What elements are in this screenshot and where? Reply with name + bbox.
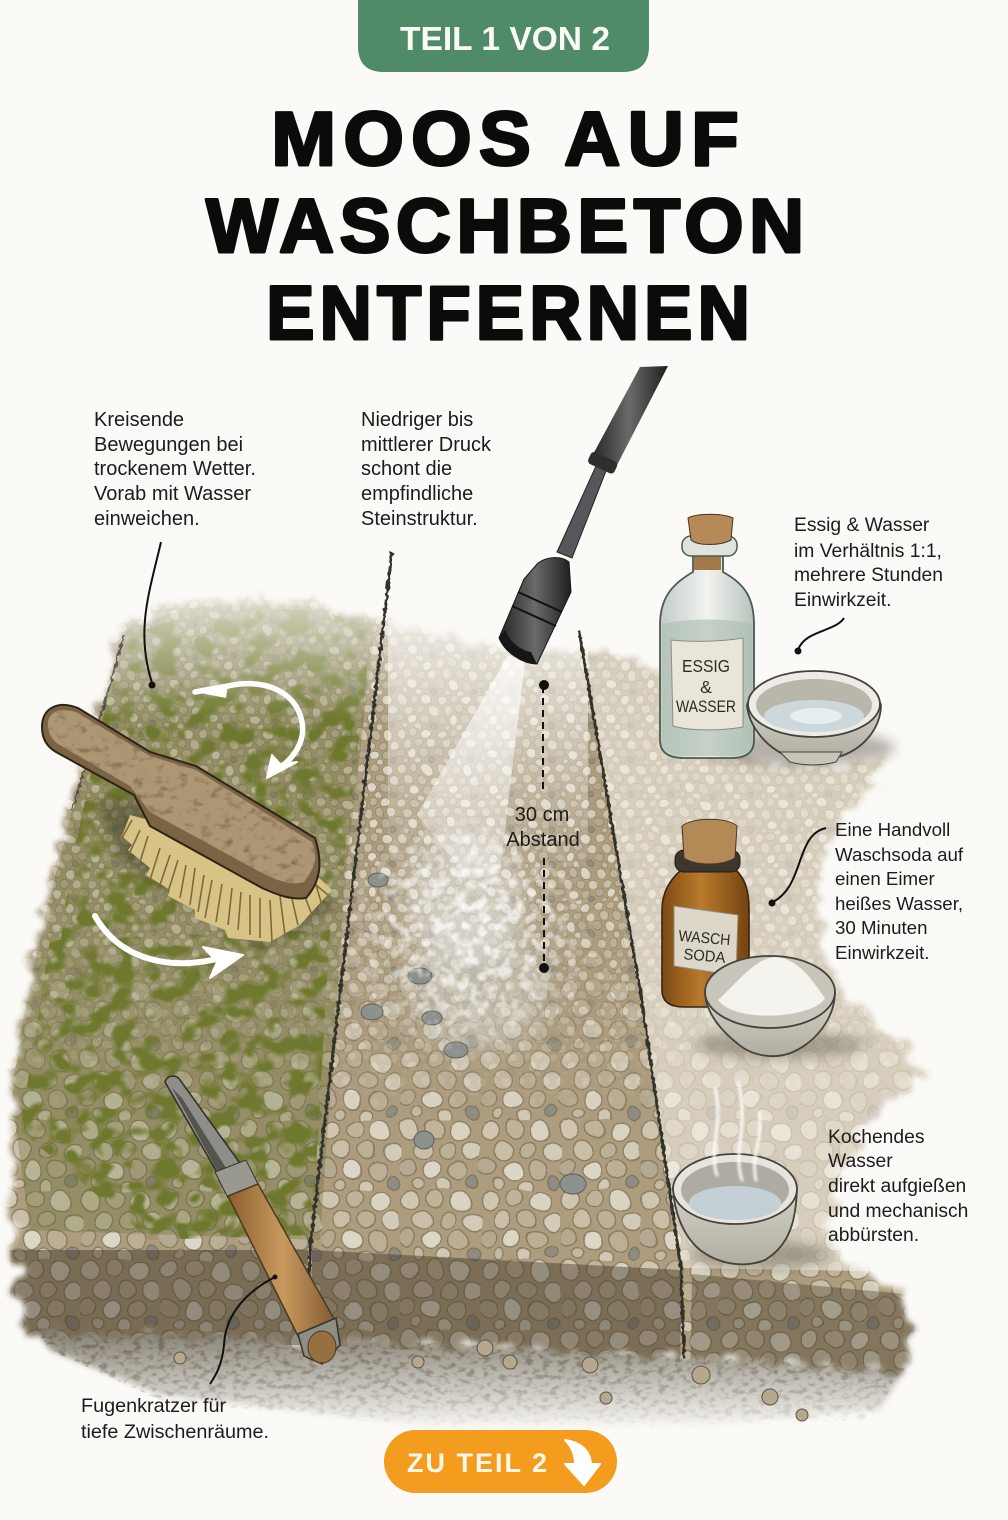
icon: bowl of boiling water [673,1082,830,1269]
moss patches, lower left slab [20,930,330,1240]
callout: pressure: schont die [361,458,452,480]
nozzle body [499,558,571,664]
shadow [705,730,895,766]
button: to part 2 [384,1430,617,1493]
title [206,98,804,355]
spray jet [417,655,525,880]
steam [714,1082,760,1180]
label: & [700,677,712,697]
distance marker: 30 cm [515,804,569,826]
bowl [673,1167,797,1264]
title: MOOS AUF [271,98,739,182]
callout: boiling water: Wasser [828,1151,893,1172]
callout: circular motions [94,409,256,688]
callout: pressure: Steinstruktur. [361,508,478,530]
callout: circular motions: einweichen. [94,508,200,530]
distance marker [506,680,580,973]
bowl with powder [705,956,835,1056]
callout: washing soda: Waschsoda auf [835,844,964,865]
distance marker: Abstand [506,829,580,851]
callout: washing soda [768,819,964,963]
label: WASSER [676,697,736,716]
fade at top of left slab [96,590,388,713]
shadow [690,1241,830,1269]
icon: arrow [565,1440,600,1485]
label: SODA [683,946,727,967]
callout: washing soda: Einwirkzeit. [835,942,930,963]
jar [662,870,749,1007]
badge: part 1 of 2 [358,0,649,72]
bottle glass [660,556,754,758]
callout: washing soda: heißes Wasser, [835,893,963,914]
moss tone, left slab [12,603,375,1240]
callout: joint scraper: tiefe Zwischenräume. [81,1421,269,1443]
wood body [42,705,319,899]
callout: circular motions: Kreisende [94,409,184,431]
callout: circular motions: Bewegungen bei [94,434,243,456]
callout: boiling water: Kochendes [828,1127,924,1148]
pebble surface [3,592,932,1378]
callout: pressure: empfindliche [361,483,473,505]
wet spray area on slab [340,790,620,1194]
callout: vinegar: Essig & Wasser [794,515,930,536]
callout: boiling water: direkt aufgießen [828,1176,966,1197]
label: WASCH [678,928,731,949]
title: WASCHBETON [206,184,804,269]
icon: joint scraper [165,1076,340,1364]
callout: pressure [361,409,492,530]
callout: washing soda: Eine Handvoll [835,819,950,840]
label: ESSIG [682,656,730,676]
icon: vinegar bottle and bowl [660,514,895,766]
shadow of brush [95,800,340,950]
title: ENTFERNEN [266,270,750,355]
moss patches, upper left slab [60,609,372,950]
slabs with soft painted edges [3,592,932,1380]
illustration: pressure washer [417,366,668,880]
arrows: circular scrubbing [95,684,303,978]
shadow [695,1031,865,1059]
callout: joint scraper [81,1274,278,1443]
illustration: washed concrete ground [0,552,1008,1440]
label [671,638,743,730]
front faces [10,1250,915,1385]
bowl [747,671,881,765]
bristles [122,815,332,942]
callout: vinegar: im Verhältnis 1:1, [794,541,942,562]
callout: vinegar: mehrere Stunden [794,565,943,586]
right slab pale wash [582,640,930,1272]
badge: part 1 of 2: TEIL 1 VON 2 [400,20,610,57]
callout: boiling water: und mechanisch [828,1201,968,1222]
callout: washing soda: einen Eimer [835,868,935,889]
lance tube [590,366,668,469]
loose gravel [174,1340,808,1421]
icon: washing soda jar and bowl [662,819,865,1059]
icon: scrubbing brush [42,705,332,942]
ground shadow [30,1322,905,1435]
callout: joint scraper: Fugenkratzer für [81,1395,227,1417]
callout: washing soda: 30 Minuten [835,917,927,938]
callout: circular motions: trockenem Wetter. [94,458,256,480]
callout: vinegar: Einwirkzeit. [794,590,892,611]
callout: boiling water [828,1127,968,1246]
button: to part 2: ZU TEIL 2 [407,1448,549,1478]
joints [72,552,684,1358]
callout: pressure: Niedriger bis [361,409,473,431]
callout: boiling water: abbürsten. [828,1225,919,1246]
callout: circular motions: Vorab mit Wasser [94,483,251,505]
label [674,906,738,976]
liquid [662,620,752,756]
callout: vinegar [794,515,943,654]
fade at top of middle slab [388,620,588,880]
stopper [682,514,737,570]
callout: pressure: mittlerer Druck [361,434,492,456]
